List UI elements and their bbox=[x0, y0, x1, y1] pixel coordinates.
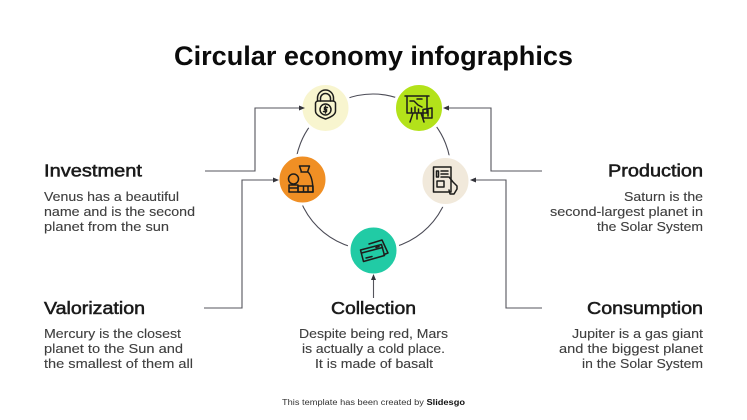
block: collection bbox=[299, 298, 448, 371]
text: valorization bbox=[44, 327, 193, 371]
text: valorization: Mercury is the closest bbox=[44, 327, 182, 341]
block: investment bbox=[44, 160, 195, 234]
icon: presentation chart bbox=[394, 84, 444, 132]
text: production: Saturn is the bbox=[624, 190, 703, 204]
text: production: the Solar System bbox=[597, 220, 703, 234]
text: consumption bbox=[559, 327, 704, 371]
text: consumption: Jupiter is a gas giant bbox=[572, 327, 704, 341]
icon: lock bbox=[301, 84, 350, 132]
heading: valorization: Valorization bbox=[44, 298, 145, 318]
block: consumption bbox=[559, 298, 704, 371]
cycle ring bbox=[295, 94, 451, 250]
arrow: investment bbox=[205, 106, 305, 171]
footer credit: This template has been created by Slidesgo bbox=[282, 398, 465, 407]
text: valorization: planet to the Sun and bbox=[44, 342, 183, 356]
block: production bbox=[550, 160, 703, 234]
icon: receipt in hand bbox=[421, 156, 470, 206]
arrow: collection bbox=[371, 274, 376, 298]
text: collection: is actually a cold place. bbox=[302, 342, 445, 356]
heading: collection: Collection bbox=[331, 298, 416, 318]
text: production: second-largest planet in bbox=[550, 205, 703, 219]
text: collection: Despite being red, Mars bbox=[299, 327, 448, 341]
text: investment: planet from the sun bbox=[44, 220, 169, 234]
text: production bbox=[550, 190, 703, 234]
text: investment: name and is the second bbox=[44, 205, 195, 219]
text: consumption: and the biggest planet bbox=[559, 342, 704, 356]
arrow: production bbox=[443, 106, 542, 171]
text: collection: It is made of basalt bbox=[315, 357, 434, 371]
text: consumption: in the Solar System bbox=[582, 357, 703, 371]
text: investment: Venus has a beautiful bbox=[44, 190, 179, 204]
arrow: consumption bbox=[470, 178, 542, 308]
text: valorization: the smallest of them all bbox=[44, 357, 193, 371]
heading: consumption: Consumption bbox=[587, 298, 703, 318]
title: Circular economy infographics bbox=[174, 41, 573, 71]
heading: investment: Investment bbox=[44, 160, 142, 180]
icon: payment cards bbox=[349, 226, 398, 275]
text: investment bbox=[44, 190, 195, 234]
text: collection bbox=[299, 327, 448, 371]
icon: money bag and coins bbox=[278, 155, 327, 204]
arrow: valorization bbox=[204, 178, 279, 308]
heading: production: Production bbox=[608, 160, 703, 180]
block: valorization bbox=[44, 298, 193, 371]
